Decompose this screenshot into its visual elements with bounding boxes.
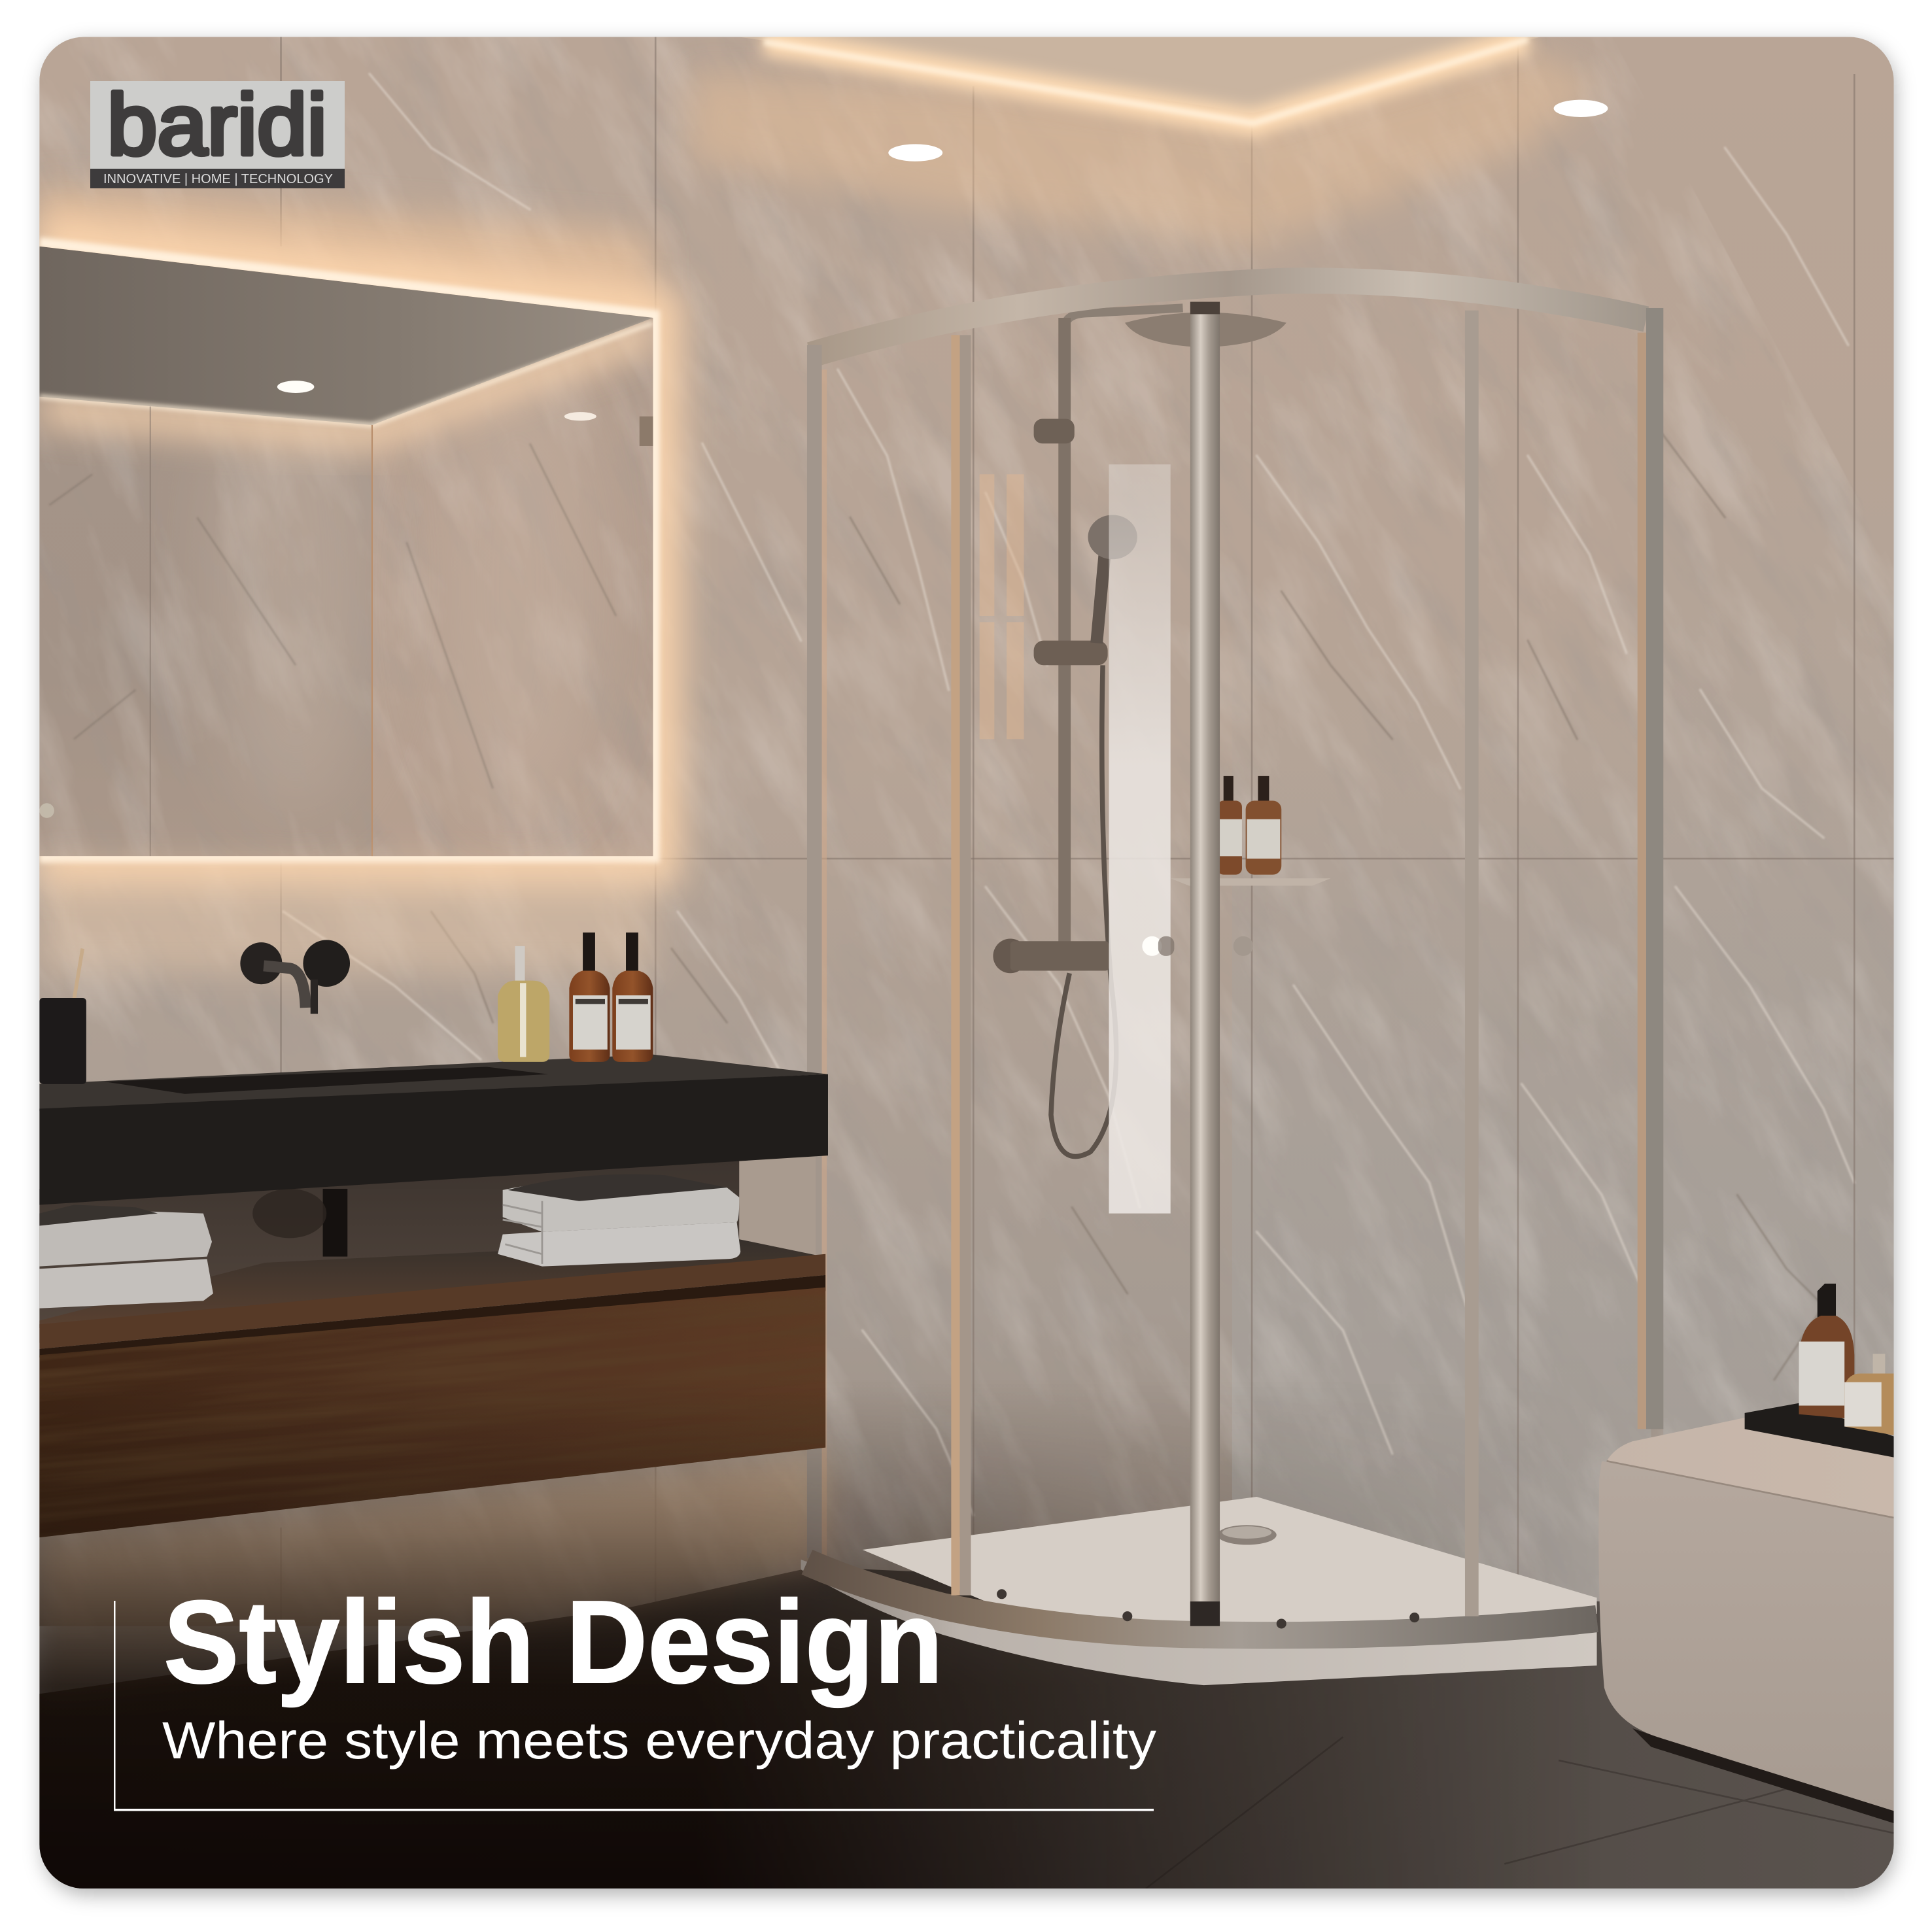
corner shelf: [1171, 878, 1331, 886]
shower bottom rail: [807, 1562, 1597, 1635]
wall warm wash behind vanity: [39, 863, 655, 973]
glow under vanity: [39, 1454, 825, 1694]
towels right: [498, 1174, 740, 1267]
reflected mirror strip on glass: [980, 474, 1024, 739]
mirror glow: [39, 243, 654, 857]
shower curb: [801, 1560, 1597, 1685]
wood shelf and drawer: [0, 1123, 1004, 1686]
rain shower head: [1066, 308, 1286, 347]
marble wall: [39, 37, 1894, 1639]
ceiling spot lights: [888, 100, 1608, 162]
tray with bottles: [1745, 1284, 1894, 1458]
shampoo bottles on corner shelf: [1217, 776, 1281, 875]
shower frame outer rails: [807, 281, 1663, 1558]
small plant: [39, 803, 54, 818]
ceiling and cove lighting: [39, 37, 1602, 323]
amber bottles: [569, 932, 653, 1062]
vanity recess wall: [39, 1140, 739, 1342]
shower door posts: [951, 302, 1479, 1626]
hand shower and hose: [1051, 515, 1137, 1157]
shower tray: [863, 1497, 1597, 1639]
ottoman: [1598, 1416, 1894, 1823]
roller fittings: [997, 1589, 1419, 1629]
title: Stylish Design: [164, 1577, 943, 1708]
heading frame lines: [114, 1601, 1154, 1811]
glass oil bottle: [498, 946, 549, 1062]
cup with toothbrush: [39, 949, 86, 1084]
door knobs: [1142, 936, 1253, 956]
bottom dark gradient: [39, 1355, 1894, 1888]
sink drain pipe: [252, 1189, 347, 1257]
wall faucet: [240, 940, 350, 1014]
wall beside vanity recess: [739, 1140, 816, 1257]
floor: [39, 1567, 1894, 1888]
glass reflection panel: [1109, 464, 1171, 1214]
subtitle: Where style meets everyday practicality: [162, 1711, 1156, 1769]
towels left: [39, 1205, 213, 1308]
logo wordmark: baridi: [107, 77, 327, 173]
shower mixer valve: [993, 939, 1109, 973]
mirror: [39, 247, 654, 863]
shower riser rail: [1034, 318, 1108, 952]
logo tagline: INNOVATIVE | HOME | TECHNOLOGY: [103, 172, 333, 186]
logo: [90, 77, 345, 188]
vanity countertop: [39, 1055, 828, 1205]
